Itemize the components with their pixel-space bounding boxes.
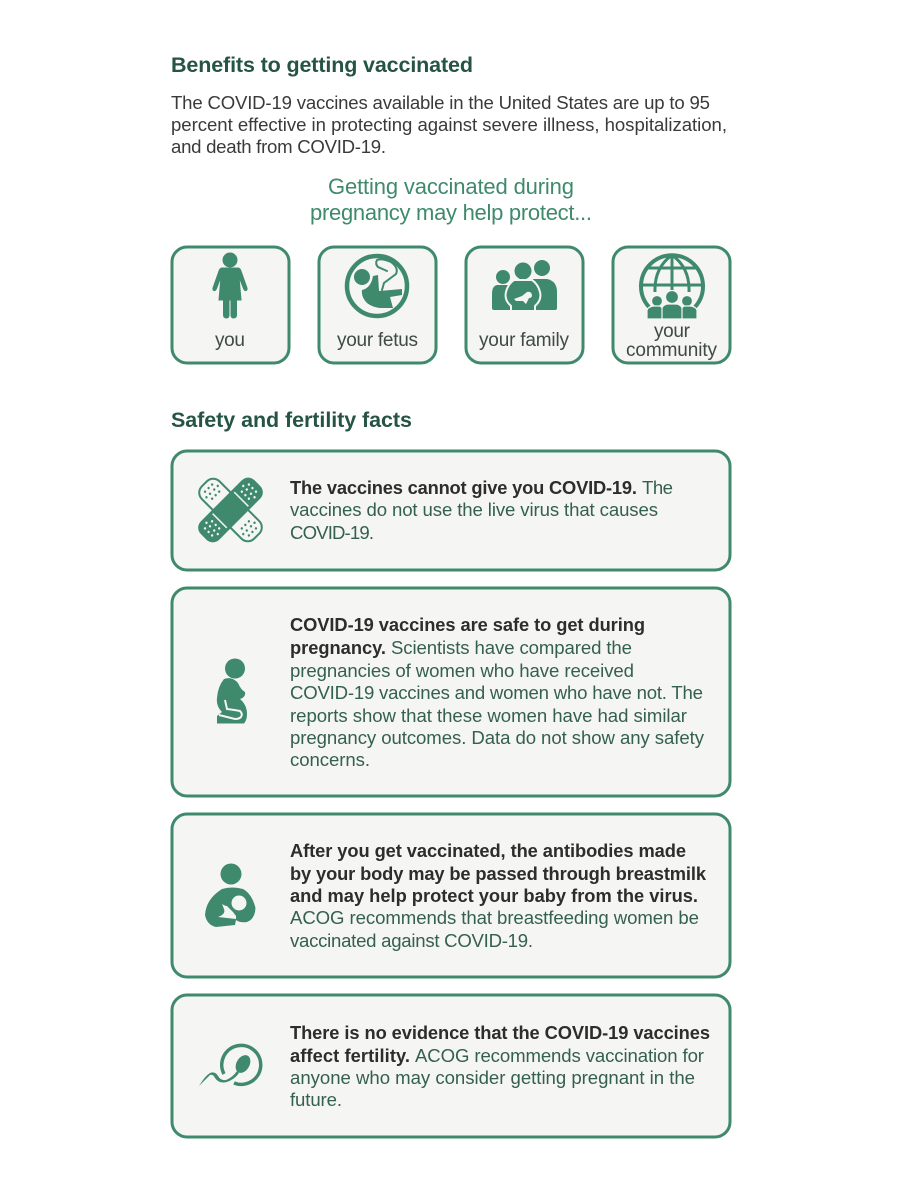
text: safe during pregnancy: Scientists have compared the — [391, 637, 632, 658]
panel: safe during pregnancy — [172, 588, 730, 796]
text: no evidence on fertility: There is no evidence that the COVID-19 vaccines — [290, 1022, 710, 1043]
panel: you — [172, 247, 289, 363]
text: breastmilk antibodies: vaccinated against COVID-19. — [290, 930, 533, 951]
text: no evidence on fertility: anyone who may consider getting pregnant in the — [290, 1067, 695, 1088]
text: breastmilk antibodies: by your body may be passed through breastmilk — [290, 863, 707, 884]
label: your community: your — [654, 321, 691, 342]
text: cannot give COVID: COVID-19. — [290, 522, 374, 543]
heading: benefits: Benefits to getting vaccinated — [171, 53, 473, 77]
panel: vaccines cannot give COVID — [172, 451, 730, 570]
icon: globe with people — [641, 255, 703, 319]
subheading: may help protect: Getting vaccinated during — [328, 174, 574, 199]
panel: your community — [613, 247, 730, 363]
text: breastmilk antibodies: ACOG recommends that breastfeeding women be — [290, 907, 699, 928]
subheading: may help protect — [310, 174, 592, 225]
panel: fertility — [172, 995, 730, 1137]
label: you: you — [215, 330, 245, 351]
text: safe during pregnancy: pregnancies of women who have received — [290, 660, 634, 681]
icon: breastfeeding mother — [205, 864, 256, 927]
label: your fetus: your fetus — [337, 330, 418, 351]
icon: woman — [213, 252, 247, 318]
icon: sperm and egg — [199, 1045, 261, 1086]
text: cannot give COVID: The — [642, 477, 673, 498]
label: your community — [626, 321, 718, 361]
text: cannot give COVID — [290, 477, 673, 543]
text: breastmilk antibodies — [290, 840, 707, 951]
text: safe during pregnancy: pregnancy outcomes. Data do not show any safety — [290, 727, 705, 748]
text: safe during pregnancy: pregnancy. — [290, 637, 386, 658]
text: breastmilk antibodies: and may help protect your baby from the virus. — [290, 885, 698, 906]
icon: fetus in circle — [347, 256, 407, 316]
intro paragraph: The COVID-19 vaccines available in the United States are up to 95 — [171, 92, 710, 113]
text: safe during pregnancy: concerns. — [290, 749, 370, 770]
text: no evidence on fertility: ACOG recommends vaccination for — [415, 1045, 704, 1066]
icon: pregnant woman — [217, 658, 247, 724]
text: no evidence on fertility: affect fertility. — [290, 1045, 410, 1066]
text: no evidence on fertility — [290, 1022, 710, 1110]
heading: safety and fertility: Safety and fertility facts — [171, 408, 412, 432]
text: cannot give COVID: The vaccines cannot give you COVID-19. — [290, 477, 637, 498]
text: safe during pregnancy: reports show that these women have had similar — [290, 705, 687, 726]
panel: antibodies through breastmilk — [172, 814, 730, 977]
text: safe during pregnancy: COVID-19 vaccines are safe to get during — [290, 614, 645, 635]
label: your community: community — [626, 340, 718, 361]
text: safe during pregnancy: COVID-19 vaccines and women who have not. The — [290, 682, 703, 703]
intro paragraph — [171, 92, 727, 157]
text: cannot give COVID: vaccines do not use the live virus that causes — [290, 499, 658, 520]
icon: family with baby — [492, 260, 557, 311]
text: safe during pregnancy — [290, 614, 705, 770]
panel: your fetus — [319, 247, 436, 363]
intro paragraph: percent effective in protecting against severe illness, hospitalization, — [171, 114, 727, 135]
label: your family: your family — [479, 330, 570, 351]
subheading: may help protect: pregnancy may help protect... — [310, 200, 592, 225]
icon: crossed bandages — [177, 457, 284, 563]
intro paragraph: and death from COVID-19. — [171, 136, 386, 157]
panel: your family — [466, 247, 583, 363]
text: breastmilk antibodies: After you get vaccinated, the antibodies made — [290, 840, 686, 861]
text: no evidence on fertility: future. — [290, 1089, 342, 1110]
